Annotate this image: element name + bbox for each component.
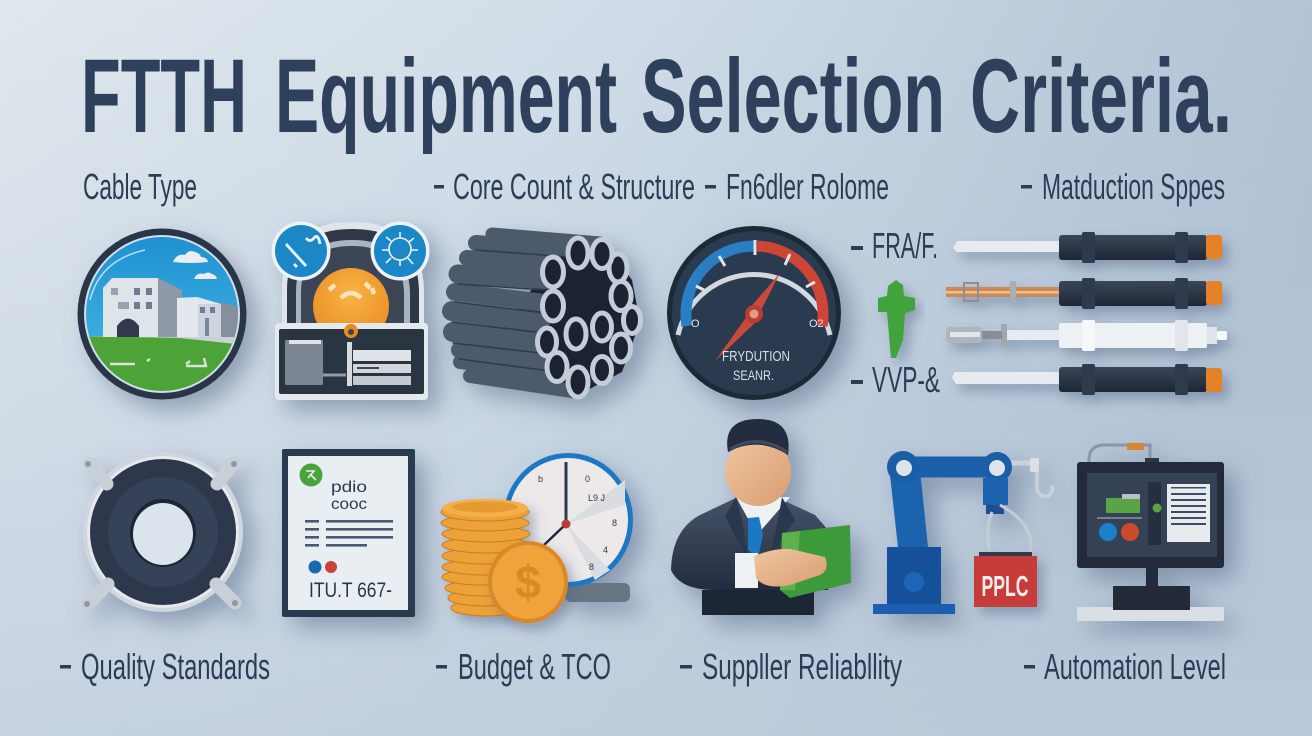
icon: speed gauge [667, 226, 841, 400]
icon: dollar coin [488, 541, 568, 623]
icon: supplier person [671, 419, 851, 615]
icon: speed gauge: SEANR. [733, 367, 774, 383]
label: splitter volume [705, 166, 889, 207]
icon: dollar coin: $ [515, 556, 541, 608]
connector 3 [946, 320, 1227, 351]
icon: building lens [78, 228, 246, 400]
icon: standards document [282, 449, 415, 617]
icon: clock: 4 [603, 545, 608, 555]
icon: plc module [974, 552, 1037, 607]
label: cable type: Cable Type [83, 166, 197, 207]
icon: speed gauge: O [691, 318, 700, 330]
blue badge right [370, 222, 430, 280]
green folder [780, 525, 851, 598]
label: quality standards [60, 646, 270, 687]
icon: green marker [878, 280, 915, 358]
icon: clock [503, 453, 633, 602]
label: supplier reliability [680, 646, 902, 687]
hand [754, 549, 827, 586]
icon: cable bundle [452, 232, 640, 397]
label: core count and structure: Core Count & Structure [453, 166, 695, 207]
title [81, 38, 1232, 155]
icon: splice machine panel [272, 222, 430, 400]
icon: clock: 8 [589, 562, 594, 572]
label: budget and tco: Budget & TCO [458, 646, 611, 687]
icon: speed gauge: FRYDUTION [722, 348, 790, 365]
red arc [757, 246, 823, 326]
icon: coin stack [441, 499, 530, 616]
icon: plc module: PPLC [982, 571, 1029, 603]
connector 4 [952, 364, 1222, 395]
blue arc [686, 246, 755, 326]
connector 1 [953, 232, 1222, 263]
label: splitter volume: Fn6dler Rolome [726, 166, 889, 207]
label: vvp [851, 359, 940, 400]
label: supplier reliability: Suppller Reliabllity [702, 646, 902, 687]
label: quality standards: Quality Standards [81, 646, 270, 687]
icon: clock: 8 [612, 518, 617, 528]
orange lens [313, 268, 389, 344]
control panel [275, 323, 428, 400]
icon: hmi monitor [1077, 443, 1224, 621]
icon: standards document: pdio [331, 479, 367, 496]
title: FTTH [81, 38, 247, 155]
cap [727, 419, 789, 455]
label: automation level [1024, 646, 1226, 687]
icon: standards document: cooc [331, 496, 367, 513]
icon: clock: b [538, 474, 543, 484]
face [725, 438, 791, 506]
icon: clock: 0 [585, 474, 590, 484]
label: fra/f [851, 225, 938, 266]
connector 2 [946, 278, 1222, 309]
label: vvp: VVP-& [872, 359, 940, 400]
title: Selection [641, 38, 945, 155]
icon: robot arm [873, 451, 1052, 614]
gauge needle [715, 273, 780, 361]
label: core count and structure [434, 166, 695, 207]
icon: flange ring [83, 452, 243, 612]
label: budget and tco [436, 646, 611, 687]
icon: speed gauge: O2 [809, 318, 824, 330]
label: fra/f: FRA/F. [872, 225, 938, 266]
title: Equipment [275, 38, 617, 155]
icon: standards document: ITU.T 667- [309, 579, 392, 602]
blue badge left [272, 222, 330, 280]
icon: clock: L9 J [588, 493, 605, 503]
label: production speed [1021, 166, 1225, 207]
